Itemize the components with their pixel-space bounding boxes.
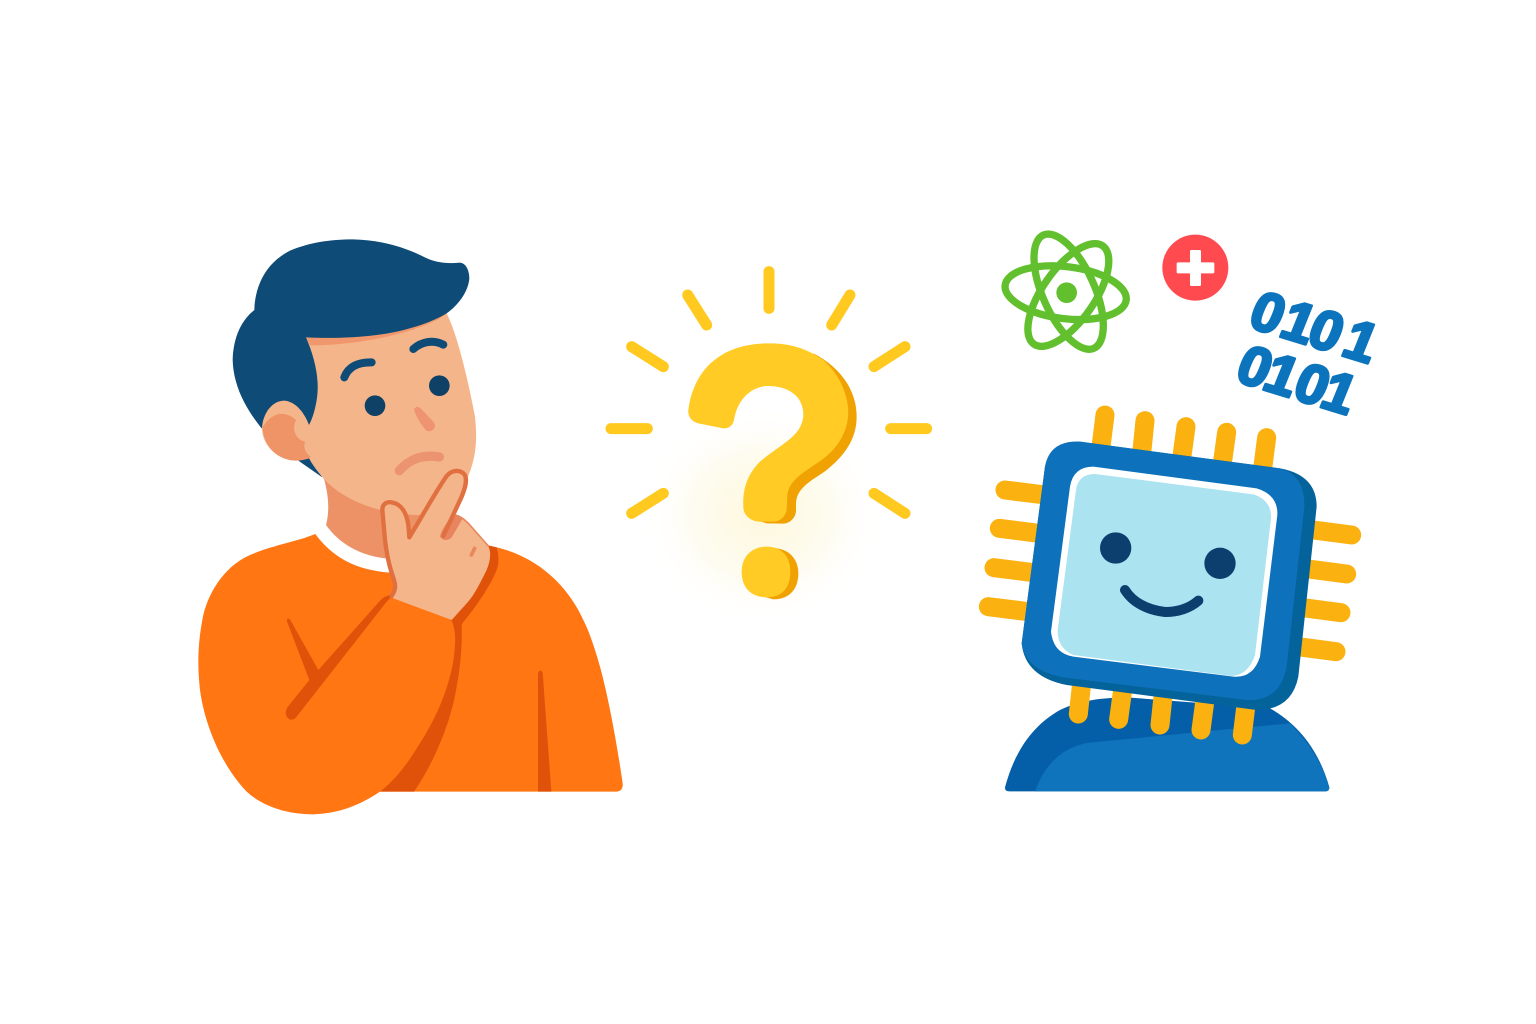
- question mark dot: [742, 547, 790, 597]
- hand shape: [382, 470, 490, 620]
- question mark shadow dot: [763, 548, 798, 599]
- binary digits: [1229, 279, 1388, 426]
- forehead shadow: [306, 313, 447, 345]
- chip pins: [988, 415, 1352, 735]
- left eye: [365, 395, 385, 416]
- screen: [1058, 474, 1271, 676]
- sweater torso: [198, 534, 623, 814]
- plus sign: [1177, 250, 1214, 286]
- nucleus: [1056, 282, 1077, 303]
- robot shoulders: [1005, 697, 1329, 791]
- rays: [611, 272, 927, 513]
- orbits: [1002, 224, 1129, 359]
- right eyebrow: [413, 342, 443, 349]
- robot left eye: [1100, 532, 1131, 564]
- robot with chip head: [988, 415, 1352, 791]
- head: [233, 239, 476, 515]
- nose: [414, 407, 435, 431]
- hair behind neck: [298, 457, 322, 477]
- mouth: [399, 456, 439, 471]
- sleeve fold: [380, 621, 462, 792]
- chip side shadow: [1022, 442, 1317, 710]
- medical plus badge: [1162, 235, 1228, 301]
- hair: [233, 239, 469, 428]
- knuckle crease: [471, 548, 475, 555]
- binary line one: 0101: [1242, 279, 1388, 375]
- finger outline: [382, 471, 466, 596]
- screen border: [1051, 467, 1277, 677]
- face: [305, 313, 476, 515]
- glow behind question mark: [640, 403, 884, 627]
- question mark shadow: [760, 353, 857, 524]
- torso fold: [538, 671, 551, 792]
- sweater and lower body: [198, 477, 623, 814]
- badge circle: [1162, 235, 1228, 301]
- atom icon: [1002, 224, 1129, 359]
- forearm crease: [286, 595, 393, 720]
- finger shadow: [440, 514, 463, 540]
- person: thinking man: [198, 239, 623, 814]
- question mark hook: [688, 343, 848, 522]
- neck: [323, 477, 423, 560]
- right eye: [429, 375, 450, 396]
- shoulder highlight: [1035, 723, 1329, 791]
- binary line two: 0101: [1229, 333, 1367, 426]
- inner ear: [263, 414, 311, 461]
- robot right eye: [1204, 548, 1236, 579]
- question mark with rays: [611, 272, 927, 599]
- ear: [262, 401, 313, 461]
- chip front: [1022, 442, 1304, 700]
- knuckle outline: [455, 515, 488, 546]
- left eyebrow: [344, 362, 372, 377]
- cuff shadow: [450, 545, 498, 624]
- hand on chin: [382, 470, 490, 620]
- robot smile: [1125, 590, 1198, 612]
